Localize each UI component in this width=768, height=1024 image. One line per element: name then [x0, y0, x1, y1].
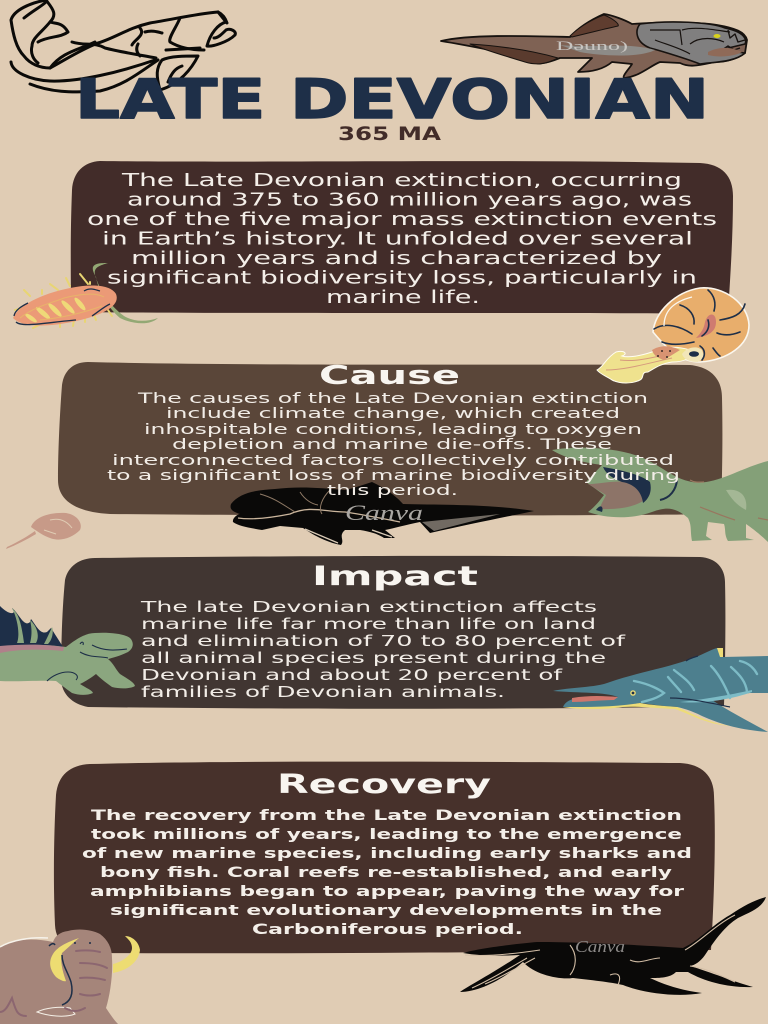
icon: blue ichthyosaur — [553, 648, 768, 732]
icon: black dunkleosteus — [231, 482, 534, 545]
text block: recovery: of new marine species, including early sharks and — [82, 846, 692, 862]
icon: nautilus — [597, 288, 749, 383]
text block: recovery: amphibians began to appear, paving the way for — [90, 884, 685, 900]
panel: recovery background — [54, 762, 715, 953]
text block: introduction: The Late Devonian extinction, occurring — [120, 171, 682, 191]
icon: woolly mammoth — [0, 930, 140, 1024]
text block: recovery: took millions of years, leading to the emergence — [91, 827, 682, 843]
text block: cause: depletion and marine die-offs. These — [172, 437, 612, 453]
panel: cause background — [58, 362, 722, 516]
text block: introduction: in Earth’s history. It unfolded over several — [102, 230, 693, 250]
text block: impact: and elimination of 70 to 80 percent of — [141, 632, 626, 650]
text block: impact: marine life far more than life on land — [141, 615, 596, 633]
text block: impact — [139, 598, 626, 701]
text block: recovery: bony fish. Coral reefs re-established, and early — [100, 865, 673, 881]
icon: brown dunkleosteus — [441, 14, 747, 78]
icon: black pliosaur — [460, 897, 766, 995]
text block: cause — [107, 391, 680, 499]
text block: recovery — [82, 808, 692, 938]
text block: cause: inhospitable conditions, leading to oxygen — [144, 422, 642, 438]
icon: horseshoe crab — [6, 513, 81, 549]
text block: impact: all animal species present during the — [141, 649, 606, 667]
text block: impact: families of Devonian animals. — [141, 683, 505, 701]
subtitle: date: 365 MA — [338, 123, 441, 145]
text block: cause: The causes of the Late Devonian extinction — [136, 391, 648, 407]
text block: impact: The late Devonian extinction affects — [139, 598, 597, 616]
icon: green t-rex — [552, 448, 768, 542]
text block: introduction: million years and is characterized by — [131, 249, 662, 269]
text block: recovery: Carboniferous period. — [252, 922, 523, 938]
icon: orange trilobite — [13, 263, 158, 328]
panel: introduction background — [71, 161, 733, 314]
text block: cause: this period. — [327, 483, 458, 499]
text block: introduction: significant biodiversity loss, particularly in — [107, 268, 697, 288]
text block: cause: to a significant loss of marine biodiversity during — [107, 468, 680, 484]
text block: impact: Devonian and about 20 percent of — [141, 666, 563, 684]
text block: introduction: marine life. — [326, 288, 480, 308]
text block: introduction — [87, 171, 717, 308]
watermark text: Dəuno) — [556, 38, 628, 53]
heading: recovery: Recovery — [277, 769, 492, 800]
heading: cause: Cause — [319, 361, 460, 391]
icon: outlined fish — [11, 0, 235, 92]
title: LATE DEVONIAN — [75, 68, 709, 131]
heading: impact: Impact — [312, 561, 478, 592]
panel: impact background — [61, 556, 725, 709]
text block: cause: interconnected factors collectively contributed — [112, 453, 674, 469]
watermark text: Canva — [345, 500, 423, 525]
text block: cause: include climate change, which created — [166, 406, 620, 422]
text block: recovery: The recovery from the Late Devonian extinction — [91, 808, 682, 824]
text block: recovery: significant evolutionary developments in the — [110, 903, 662, 919]
text block: introduction: around 375 to 360 million years ago, was — [127, 190, 692, 210]
text block: introduction: one of the five major mass extinction events — [87, 210, 717, 230]
icon: green sail-backed reptile — [0, 606, 135, 695]
watermark text: Canva — [575, 937, 625, 956]
